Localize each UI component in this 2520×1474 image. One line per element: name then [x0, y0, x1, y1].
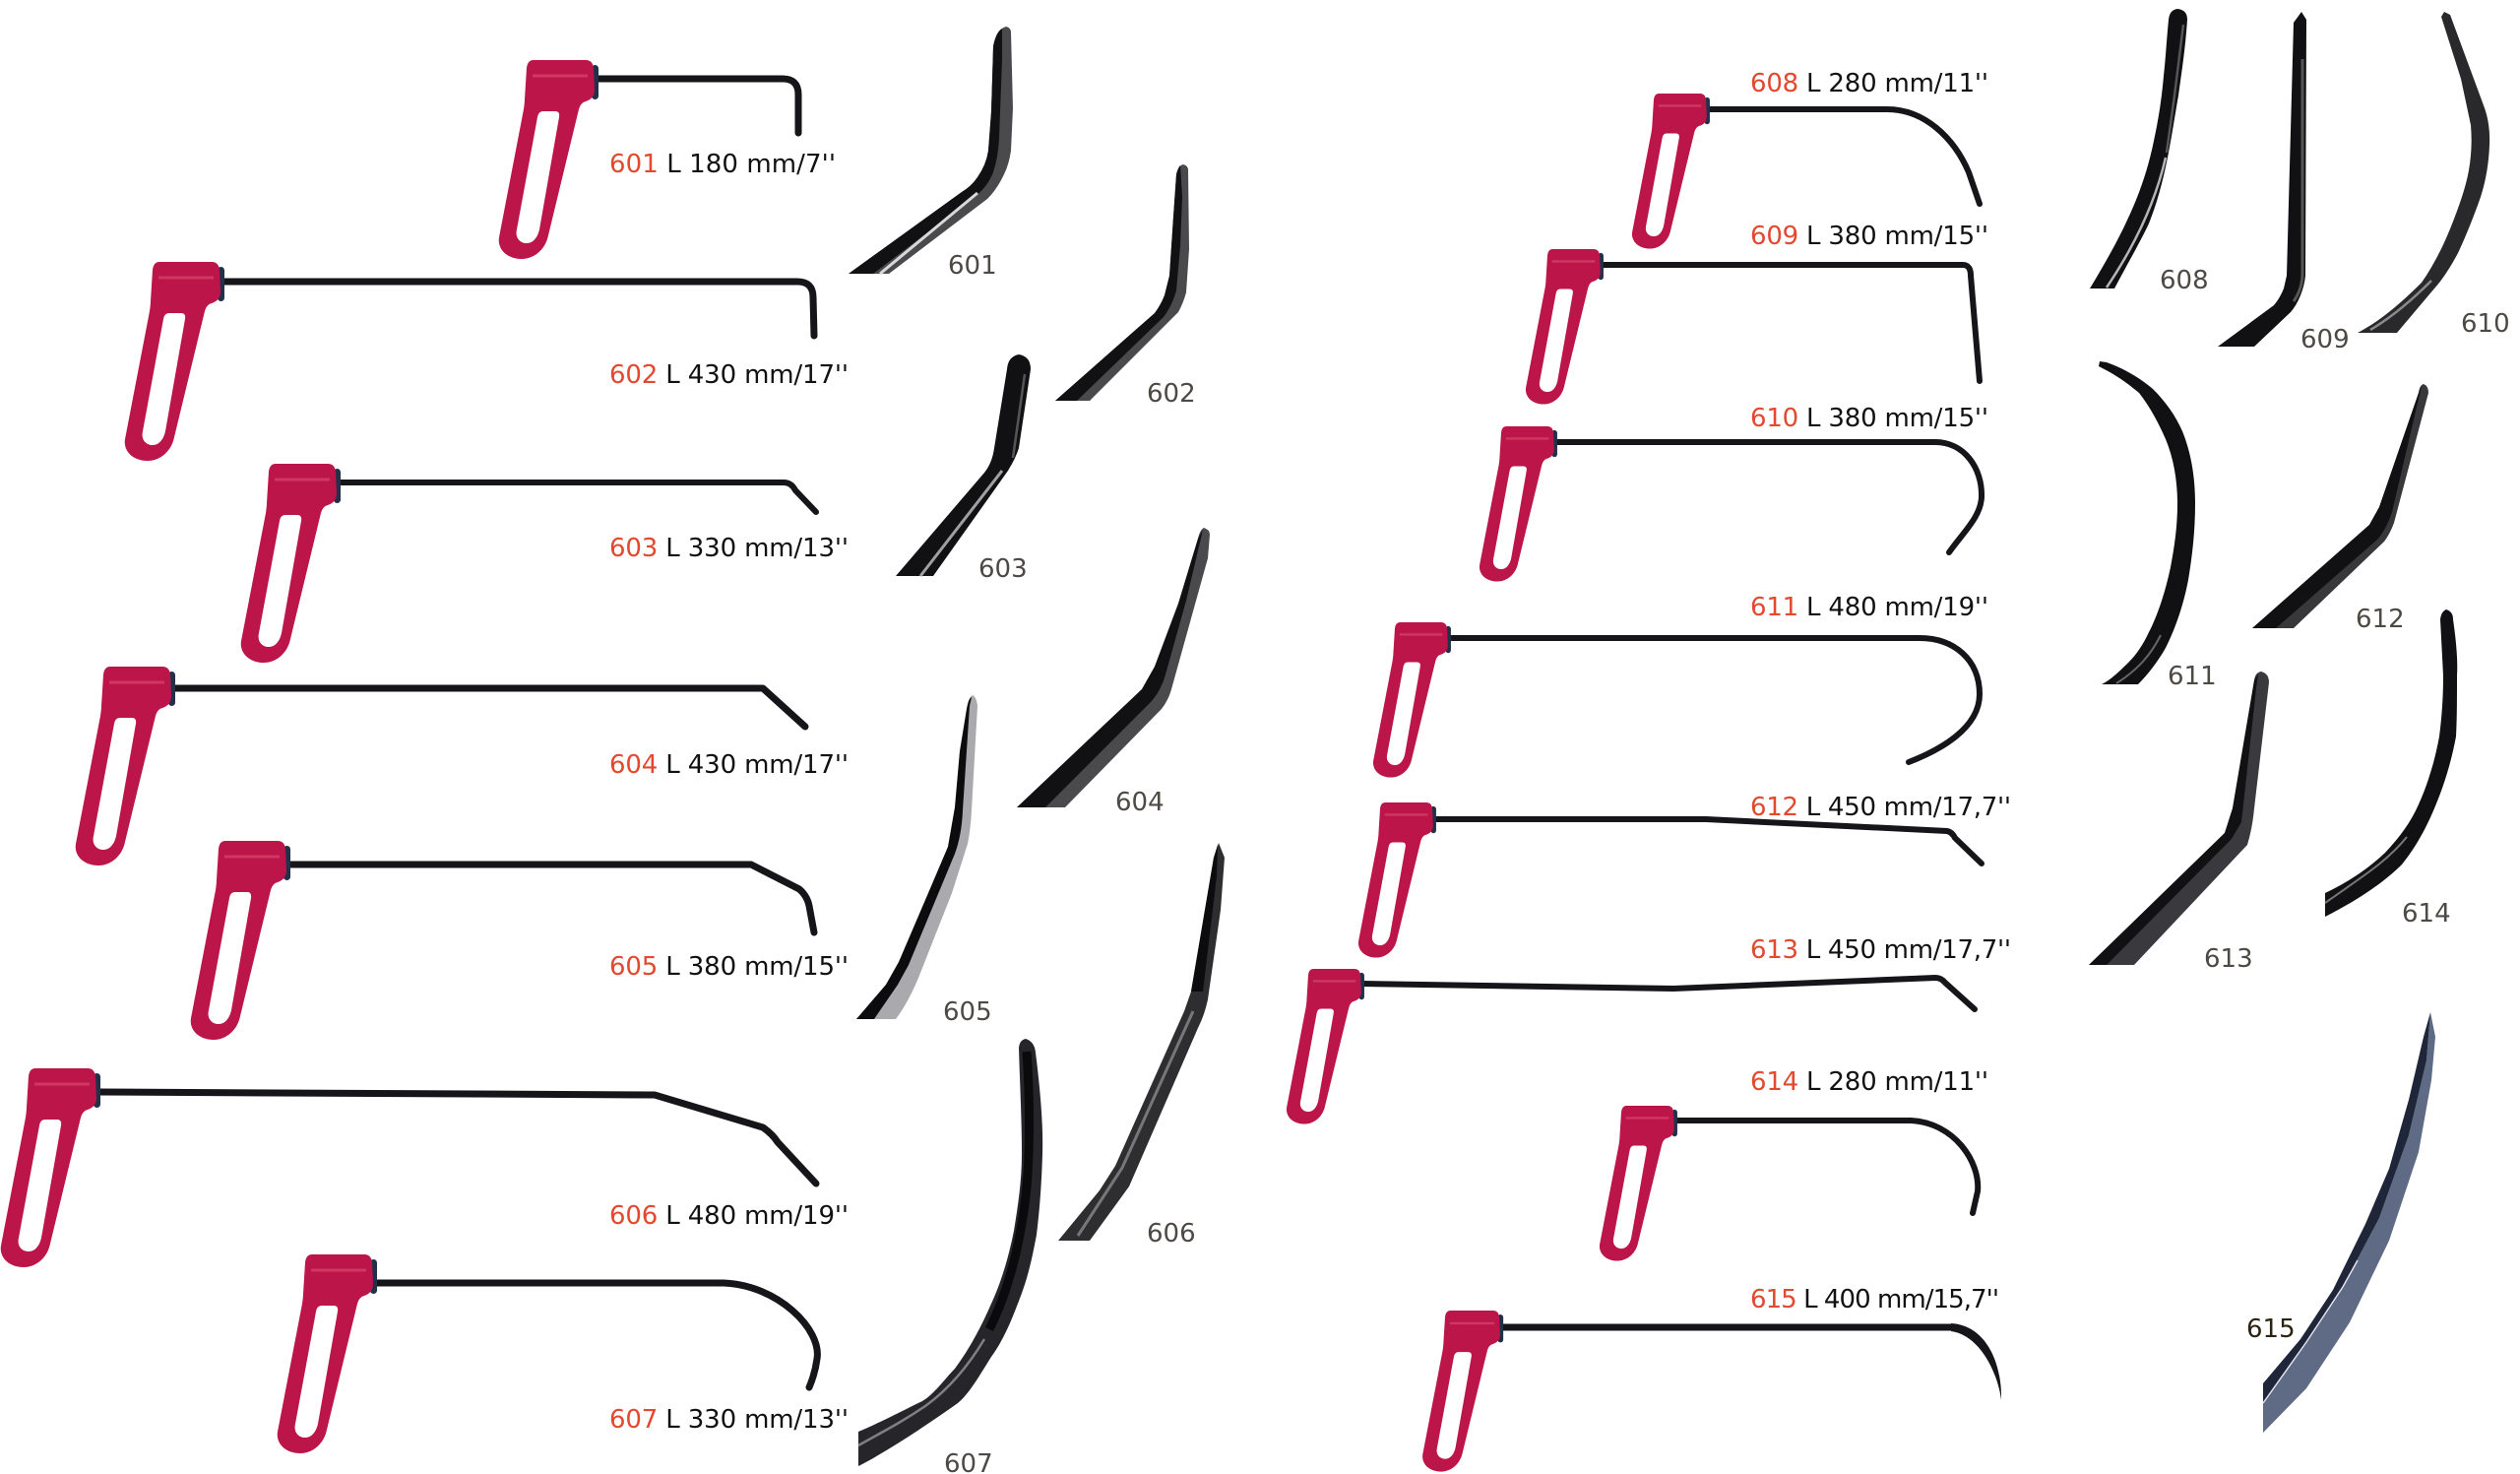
tool 604	[76, 667, 849, 865]
tip detail 615: 615	[2246, 1314, 2296, 1344]
rod 604	[172, 688, 805, 727]
tool 603	[241, 464, 849, 663]
label 604: 604 L 430 mm/17''	[609, 750, 849, 780]
tip detail 610: 610	[2461, 309, 2510, 339]
tip detail 610	[2358, 12, 2510, 339]
rod 610	[1553, 442, 1982, 552]
label 614: 614 L 280 mm/11''	[1750, 1067, 1988, 1097]
tip detail 602: 602	[1147, 379, 1196, 409]
rod 612	[1432, 819, 1982, 864]
label 609: 609 L 380 mm/15''	[1750, 222, 1988, 251]
handle 613	[1287, 969, 1364, 1124]
tip detail 606	[1058, 843, 1225, 1249]
handle 603	[241, 464, 341, 663]
tip detail 601: 601	[948, 251, 997, 281]
label 607: 607 L 330 mm/13''	[609, 1405, 849, 1435]
tip detail 608: 608	[2160, 266, 2209, 295]
rod 611	[1449, 638, 1980, 762]
label 605: 605 L 380 mm/15''	[609, 952, 849, 982]
label 603: 603 L 330 mm/13''	[609, 534, 849, 563]
tip detail 611: 611	[2168, 662, 2217, 691]
rod 601	[594, 79, 798, 133]
label 608: 608 L 280 mm/11''	[1750, 69, 1988, 98]
tip detail 612: 612	[2356, 605, 2405, 634]
rod 613	[1362, 978, 1975, 1009]
label 611: 611 L 480 mm/19''	[1750, 593, 1988, 622]
handle 606	[1, 1068, 100, 1267]
tip detail 601	[849, 27, 1013, 281]
rod 605	[289, 865, 814, 932]
rod 614	[1676, 1121, 1978, 1213]
tool 601	[499, 60, 836, 259]
label 610: 610 L 380 mm/15''	[1750, 404, 1988, 433]
tool 612	[1358, 793, 2011, 958]
tool 605	[191, 841, 849, 1040]
handle 608	[1632, 94, 1710, 249]
rod 602	[220, 282, 814, 336]
tool 615	[1422, 1285, 2001, 1472]
tip detail 606: 606	[1147, 1219, 1196, 1249]
tip detail 603: 603	[978, 554, 1028, 584]
rod 603	[338, 482, 816, 512]
tip detail 613: 613	[2204, 944, 2253, 974]
rod 609	[1601, 265, 1980, 381]
handle 611	[1373, 622, 1451, 778]
label 602: 602 L 430 mm/17''	[609, 360, 849, 390]
tool 610	[1480, 404, 1988, 582]
tip detail 614: 614	[2402, 899, 2451, 929]
tip detail 605	[856, 695, 992, 1027]
tip detail 604: 604	[1115, 788, 1165, 817]
handle 601	[499, 60, 598, 259]
handle 602	[125, 262, 224, 461]
tip detail 605: 605	[943, 997, 992, 1027]
tool 614	[1600, 1067, 1988, 1261]
tip detail 604	[1017, 528, 1210, 817]
tool 613	[1287, 935, 2011, 1124]
handle 610	[1480, 426, 1557, 582]
tip detail 614	[2325, 609, 2457, 929]
tool 602	[125, 262, 849, 461]
tip detail 615	[2246, 1012, 2435, 1433]
handle 607	[278, 1254, 377, 1453]
label 606: 606 L 480 mm/19''	[609, 1201, 849, 1231]
rod tip 615	[1951, 1323, 2001, 1400]
label 601: 601 L 180 mm/7''	[609, 150, 836, 179]
tool 609	[1526, 222, 1988, 405]
tool 611	[1373, 593, 1988, 778]
rod 608	[1706, 109, 1980, 204]
tip detail 609: 609	[2300, 325, 2350, 354]
label 612: 612 L 450 mm/17,7''	[1750, 793, 2011, 822]
tool 608	[1632, 69, 1988, 249]
tool 606	[1, 1068, 849, 1267]
tip detail 612	[2252, 384, 2428, 634]
tip detail 608	[2090, 9, 2209, 295]
tip detail 613	[2089, 672, 2269, 974]
rod 606	[98, 1092, 816, 1184]
rod 615	[1503, 1323, 1951, 1331]
label 615: 615 L 400 mm/15,7''	[1750, 1285, 1999, 1314]
handle 615	[1422, 1311, 1503, 1472]
tool 607	[278, 1254, 849, 1453]
tip detail 607	[858, 1039, 1042, 1474]
label 613: 613 L 450 mm/17,7''	[1750, 935, 2011, 965]
rod 607	[374, 1283, 817, 1387]
tip detail 609	[2218, 12, 2350, 354]
tip detail 611	[2099, 361, 2217, 691]
tip detail 602	[1055, 164, 1196, 409]
handle 604	[76, 667, 175, 865]
handle 612	[1358, 802, 1436, 958]
handle 609	[1526, 249, 1604, 405]
tip detail 603	[896, 354, 1031, 584]
handle 614	[1600, 1106, 1677, 1261]
handle 605	[191, 841, 290, 1040]
